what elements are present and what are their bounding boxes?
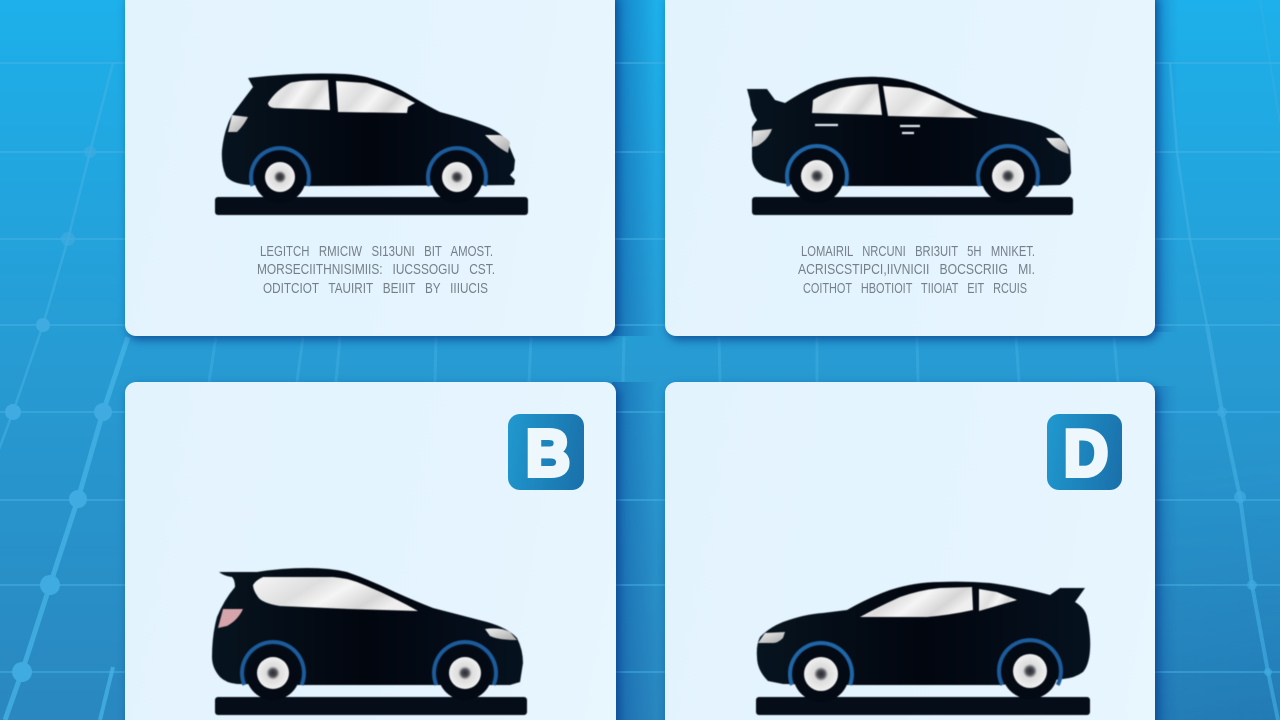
badge: letter D xyxy=(1047,414,1122,490)
panel: top-left hatchback card xyxy=(125,0,615,336)
icon: black sedan with rear spoiler xyxy=(746,76,1074,216)
badge: letter B: B xyxy=(526,416,570,490)
text block: caption xyxy=(257,243,495,297)
panel: top-right sedan card xyxy=(665,0,1155,336)
panel: bottom-right coupe card D xyxy=(665,382,1155,720)
icon: black coupe with rear spoiler xyxy=(755,580,1091,716)
badge: letter B xyxy=(508,414,584,490)
badge: letter D: D xyxy=(1064,416,1108,490)
panel: bottom-left hatchback card B xyxy=(125,382,616,720)
icon: black hatchback side view xyxy=(214,72,529,216)
text block: caption xyxy=(798,243,1035,297)
icon: black hatchback with roof spoiler xyxy=(211,567,528,716)
